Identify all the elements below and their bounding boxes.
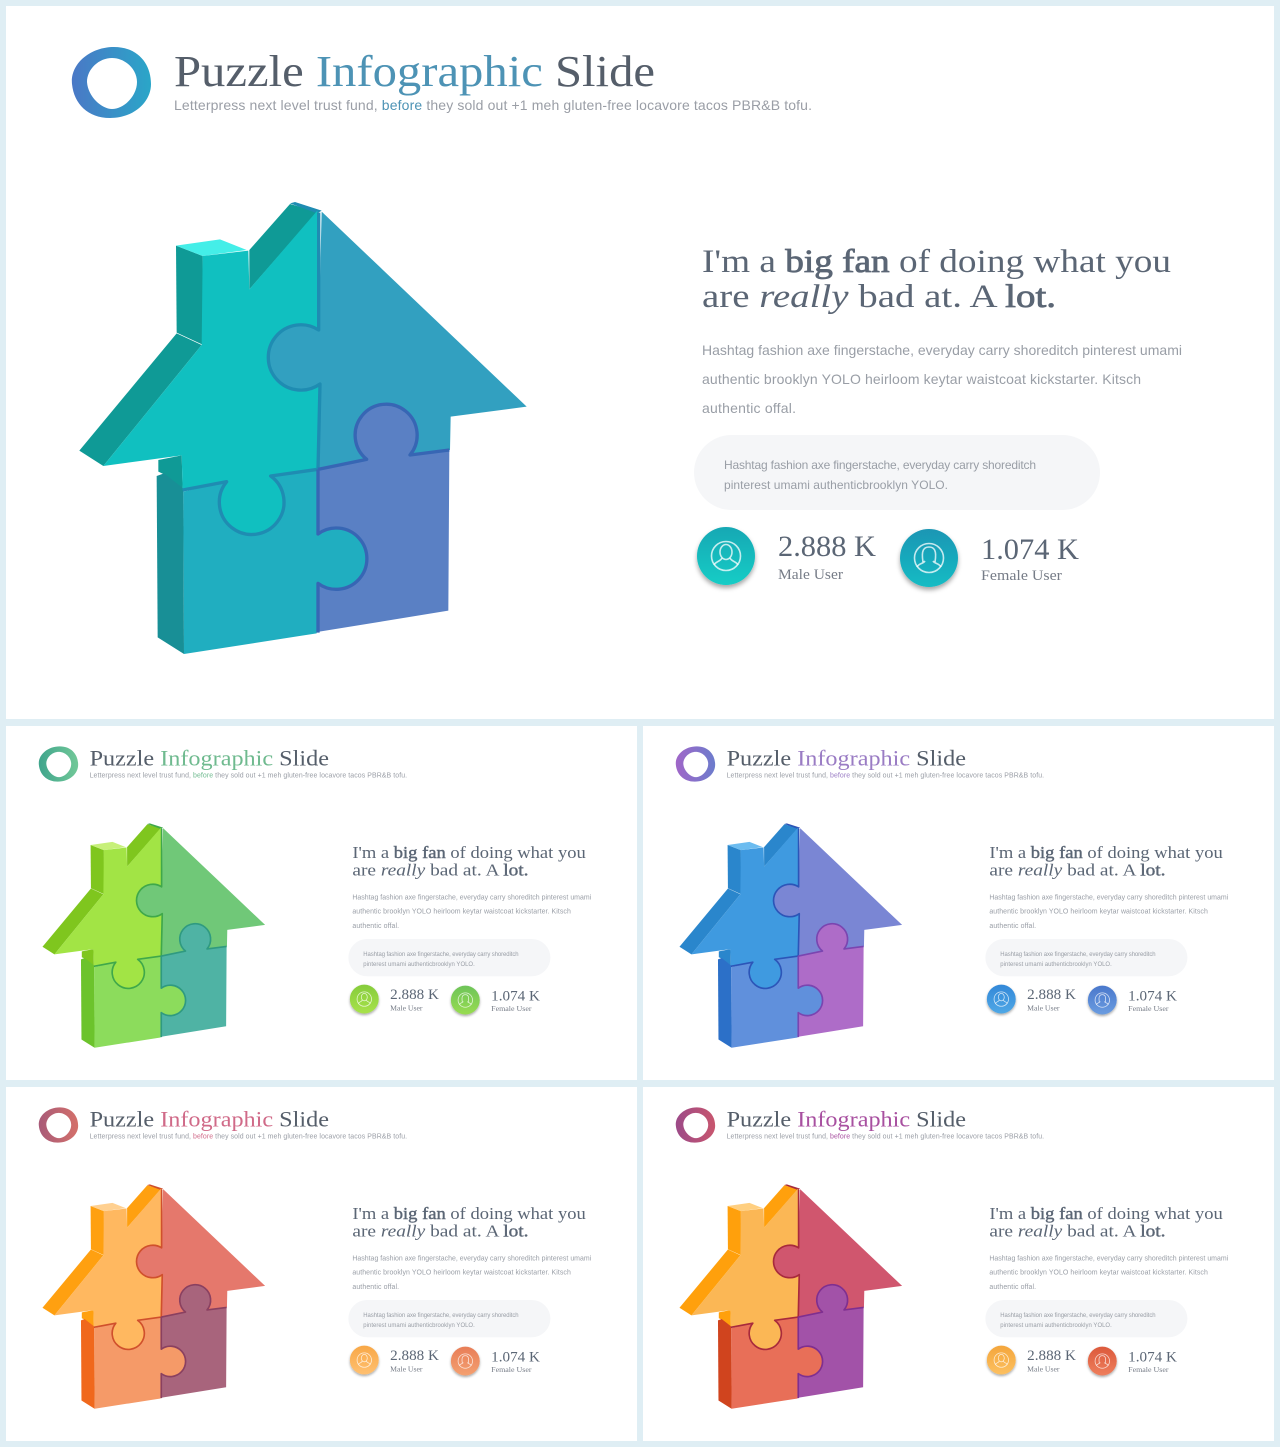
body paragraph: Hashtag fashion axe fingerstache, everyday carry shoreditch pinterest umami: [352, 894, 592, 901]
body paragraph: Hashtag fashion axe fingerstache, everyday carry shoreditch pinterest umami: [989, 1255, 1229, 1262]
stat: female user: [451, 986, 540, 1014]
callout pill: [985, 1300, 1187, 1337]
callout pill: pinterest umami authenticbrooklyn YOLO.: [363, 1323, 475, 1329]
stat: male user: [987, 985, 1076, 1013]
body paragraph: authentic brooklyn YOLO heirloom keytar waistcoat kickstarter. Kitsch: [989, 1270, 1208, 1277]
title: Puzzle Infographic Slide: [90, 1108, 329, 1132]
body paragraph: authentic offal.: [989, 1284, 1036, 1291]
stat: female user: 1.074 K: [491, 989, 540, 1005]
subtitle: Letterpress next level trust fund, before they sold out +1 meh gluten-free locavore tacos PBR&B tofu.: [174, 97, 812, 113]
stat: female user: [1088, 986, 1177, 1014]
headline: are really bad at. A lot.: [352, 860, 529, 879]
stat: male user: Male User: [778, 567, 843, 583]
title: Puzzle Infographic Slide: [727, 747, 966, 771]
callout pill: [985, 939, 1187, 976]
subtitle: Letterpress next level trust fund, before they sold out +1 meh gluten-free locavore tacos PBR&B tofu.: [727, 1134, 1044, 1141]
stat: male user: [697, 527, 876, 585]
stat: male user: [350, 985, 439, 1013]
callout pill: Hashtag fashion axe fingerstache, everyday carry shoreditch: [1000, 1313, 1156, 1319]
callout pill: Hashtag fashion axe fingerstache, everyday carry shoreditch: [363, 1313, 519, 1319]
puzzle house illustration: [42, 823, 265, 1048]
panel: magenta slide: [643, 1087, 1274, 1441]
callout pill: [694, 435, 1100, 510]
body paragraph: authentic offal.: [989, 923, 1036, 930]
headline: I'm a big fan of doing what you: [352, 843, 586, 862]
title: Puzzle Infographic Slide: [727, 1108, 966, 1132]
body paragraph: [989, 1255, 1229, 1291]
stat: female user: Female User: [1128, 1004, 1169, 1013]
stat: female user: [451, 1347, 540, 1375]
stat: male user: Male User: [1027, 1364, 1060, 1373]
icon: ring logo: [676, 746, 715, 782]
stat: male user: 2.888 K: [1027, 1348, 1076, 1364]
headline: [702, 244, 1171, 315]
stat: male user: 2.888 K: [778, 531, 876, 563]
stat: female user: Female User: [1128, 1365, 1169, 1374]
stat: female user: 1.074 K: [491, 1350, 540, 1366]
callout pill: Hashtag fashion axe fingerstache, everyday carry shoreditch: [363, 952, 519, 958]
panel: orange slide: [6, 1087, 637, 1441]
body paragraph: Hashtag fashion axe fingerstache, everyday carry shoreditch pinterest umami: [702, 342, 1182, 358]
panel: blue slide: [643, 726, 1274, 1080]
headline: I'm a big fan of doing what you: [989, 1204, 1223, 1223]
body paragraph: authentic offal.: [352, 923, 399, 930]
callout pill: pinterest umami authenticbrooklyn YOLO.: [724, 478, 948, 492]
subtitle: Letterpress next level trust fund, before they sold out +1 meh gluten-free locavore tacos PBR&B tofu.: [727, 773, 1044, 780]
headline: are really bad at. A lot.: [989, 1221, 1166, 1240]
puzzle house illustration: [79, 202, 527, 654]
icon: ring logo: [39, 1107, 78, 1143]
headline: [989, 843, 1223, 879]
body paragraph: Hashtag fashion axe fingerstache, everyday carry shoreditch pinterest umami: [352, 1255, 592, 1262]
body paragraph: authentic brooklyn YOLO heirloom keytar waistcoat kickstarter. Kitsch: [702, 371, 1141, 387]
puzzle house illustration: [679, 1184, 902, 1409]
puzzle house illustration: [42, 1184, 265, 1409]
stat: male user: Male User: [1027, 1003, 1060, 1012]
body paragraph: authentic brooklyn YOLO heirloom keytar waistcoat kickstarter. Kitsch: [352, 1270, 571, 1277]
callout pill: pinterest umami authenticbrooklyn YOLO.: [1000, 1323, 1112, 1329]
headline: [352, 1204, 586, 1240]
icon: ring logo: [72, 47, 151, 118]
headline: [989, 1204, 1223, 1240]
headline: are really bad at. A lot.: [989, 860, 1166, 879]
stat: male user: [987, 1346, 1076, 1374]
headline: I'm a big fan of doing what you: [989, 843, 1223, 862]
body paragraph: [989, 894, 1229, 930]
stat: female user: Female User: [491, 1004, 532, 1013]
headline: I'm a big fan of doing what you: [702, 244, 1171, 280]
body paragraph: authentic brooklyn YOLO heirloom keytar waistcoat kickstarter. Kitsch: [352, 909, 571, 916]
stat: male user: 2.888 K: [390, 1348, 439, 1364]
callout pill: pinterest umami authenticbrooklyn YOLO.: [1000, 962, 1112, 968]
panel: main slide: [6, 6, 1274, 719]
body paragraph: [352, 894, 592, 930]
subtitle: Letterpress next level trust fund, before they sold out +1 meh gluten-free locavore tacos PBR&B tofu.: [90, 1134, 407, 1141]
headline: [352, 843, 586, 879]
icon: ring logo: [39, 746, 78, 782]
stat: male user: [350, 1346, 439, 1374]
callout pill: [348, 939, 550, 976]
panel: green slide: [6, 726, 637, 1080]
stat: female user: Female User: [981, 568, 1062, 584]
stat: female user: [900, 529, 1079, 587]
icon: ring logo: [676, 1107, 715, 1143]
puzzle house illustration: [679, 823, 902, 1048]
headline: are really bad at. A lot.: [352, 1221, 529, 1240]
callout pill: pinterest umami authenticbrooklyn YOLO.: [363, 962, 475, 968]
callout pill: Hashtag fashion axe fingerstache, everyday carry shoreditch: [1000, 952, 1156, 958]
title: Puzzle Infographic Slide: [90, 747, 329, 771]
body paragraph: authentic offal.: [702, 400, 796, 416]
title: Puzzle Infographic Slide: [174, 47, 655, 96]
body paragraph: authentic brooklyn YOLO heirloom keytar waistcoat kickstarter. Kitsch: [989, 909, 1208, 916]
headline: are really bad at. A lot.: [702, 279, 1056, 315]
stat: male user: Male User: [390, 1364, 423, 1373]
stat: male user: 2.888 K: [390, 987, 439, 1003]
headline: I'm a big fan of doing what you: [352, 1204, 586, 1223]
callout pill: [348, 1300, 550, 1337]
stat: female user: 1.074 K: [1128, 989, 1177, 1005]
body paragraph: [702, 342, 1182, 416]
stat: male user: Male User: [390, 1003, 423, 1012]
body paragraph: authentic offal.: [352, 1284, 399, 1291]
stat: female user: 1.074 K: [1128, 1350, 1177, 1366]
body paragraph: [352, 1255, 592, 1291]
stat: male user: 2.888 K: [1027, 987, 1076, 1003]
stat: female user: [1088, 1347, 1177, 1375]
subtitle: Letterpress next level trust fund, before they sold out +1 meh gluten-free locavore tacos PBR&B tofu.: [90, 773, 407, 780]
stat: female user: 1.074 K: [981, 534, 1079, 566]
body paragraph: Hashtag fashion axe fingerstache, everyday carry shoreditch pinterest umami: [989, 894, 1229, 901]
stat: female user: Female User: [491, 1365, 532, 1374]
callout pill: Hashtag fashion axe fingerstache, everyday carry shoreditch: [724, 458, 1036, 472]
